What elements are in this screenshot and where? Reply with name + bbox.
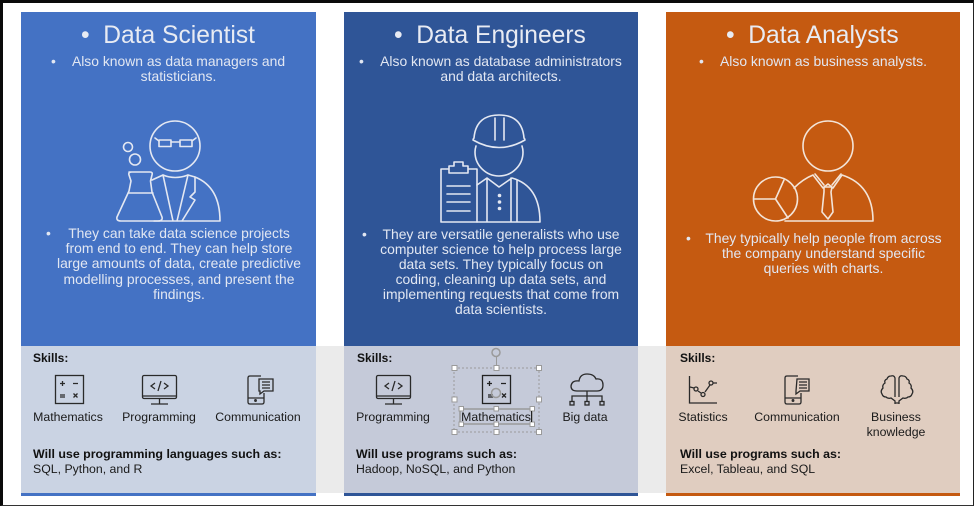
text: scientist languages: Will use programming languages such as: <box>33 447 281 461</box>
text: scientist languages <box>33 447 281 476</box>
panel: scientist skills area <box>21 346 316 493</box>
text: engineer programs <box>356 447 517 476</box>
text: engineer description: • <box>362 226 367 242</box>
skill label: business knowledge <box>867 410 925 439</box>
skill label: big data: Big data <box>562 410 608 424</box>
label: engineer skills: Skills: <box>357 351 392 365</box>
skill label: communication: Communication <box>215 410 301 424</box>
text: scientist languages: SQL, Python, and R <box>33 462 142 476</box>
text: engineer description <box>362 226 622 317</box>
text: scientist aka: statisticians. <box>141 68 216 84</box>
text: scientist description: findings. <box>153 286 205 302</box>
skill label: business knowledge: Business <box>871 410 921 424</box>
text: scientist description: They can take data science projects <box>68 225 290 241</box>
text: engineer description: implementing requests that come from <box>383 286 619 302</box>
skill label: business knowledge: knowledge <box>867 425 925 439</box>
skill label: mathematics 2: Mathematics <box>461 410 531 424</box>
grey background bands <box>316 346 666 493</box>
text: analyst programs <box>680 447 841 476</box>
text: analyst description: queries with charts. <box>764 260 883 276</box>
skill label: programming: Programming <box>122 410 196 424</box>
panel: analyst skills area <box>666 346 960 493</box>
text: analyst programs: Will use programs such as: <box>680 447 841 461</box>
heading: data engineers: • Data Engineers <box>394 22 586 49</box>
text: scientist aka <box>51 53 285 84</box>
panel: data engineers <box>344 12 638 496</box>
text: analyst description: They typically help people from across <box>705 230 942 246</box>
panel: engineer skills area <box>344 346 638 493</box>
text: scientist description <box>46 225 301 302</box>
text: scientist description: from end to end. They can help store <box>66 240 292 256</box>
panel: data analysts <box>666 12 960 496</box>
text: engineer programs: Will use programs such as: <box>356 447 517 461</box>
text: scientist description: large amounts of data, create predictive <box>57 255 301 271</box>
text: engineer description: data sets. They typically focus on <box>399 256 603 272</box>
text: analyst description: the company understand specific <box>722 245 925 261</box>
text: engineer description: data scientists. <box>455 301 547 317</box>
text: engineer aka <box>359 53 622 84</box>
text: scientist aka: • <box>51 53 56 69</box>
skill label: programming 2: Programming <box>356 410 430 424</box>
text: scientist description: • <box>46 225 51 241</box>
panel: data scientist <box>21 12 316 496</box>
label: scientist skills: Skills: <box>33 351 68 365</box>
text: analyst description: • <box>686 230 691 246</box>
skill label: statistics: Statistics <box>678 410 728 424</box>
text: engineer description: They are versatile generalists who use <box>382 226 620 242</box>
skill label: mathematics: Mathematics <box>33 410 103 424</box>
text: engineer aka: Also known as database administrators <box>380 53 622 69</box>
heading: data analysts: • Data Analysts <box>726 22 899 49</box>
skill label: communication 2: Communication <box>754 410 840 424</box>
text: analyst aka: Also known as business analysts. <box>720 53 927 69</box>
text: engineer description: computer science to help process large <box>380 241 622 257</box>
text: engineer description: coding, cleaning up data sets, and <box>396 271 606 287</box>
text: analyst aka: • <box>699 53 704 69</box>
text: analyst description <box>686 230 942 276</box>
text: scientist aka: Also known as data managers and <box>72 53 285 69</box>
label: analyst skills: Skills: <box>680 351 715 365</box>
text: scientist description: modelling processes, and present the <box>64 271 294 287</box>
heading: data scientist: • Data Scientist <box>81 22 255 49</box>
text: engineer programs: Hadoop, NoSQL, and Python <box>356 462 515 476</box>
text: engineer aka: • <box>359 53 364 69</box>
text: analyst programs: Excel, Tableau, and SQL <box>680 462 815 476</box>
text: engineer aka: and data architects. <box>440 68 562 84</box>
